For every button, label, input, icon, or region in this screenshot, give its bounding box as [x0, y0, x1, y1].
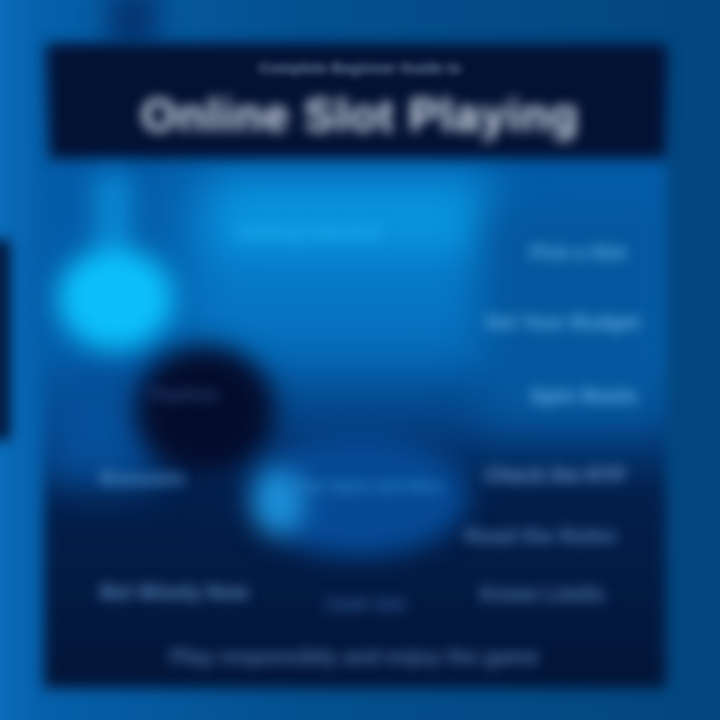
list item 2: Set Your Budget [485, 312, 640, 334]
subtitle: Complete Beginner Guide to [259, 60, 461, 77]
central ellipse [248, 436, 468, 556]
header band [50, 46, 666, 158]
list item 5: Read the Rules [465, 525, 617, 548]
footer text: Play responsibly and enjoy the game [170, 646, 539, 669]
label in ellipse: Free Spins and Wins [295, 478, 442, 495]
label: left middle: Bonuses [100, 468, 184, 490]
list item 4: Check the RTP [485, 465, 626, 487]
icon: hand pointing up [42, 159, 188, 366]
list item 1: Pick a Slot [530, 243, 626, 264]
main panel [44, 44, 666, 688]
title: Online Slot Playing [141, 89, 579, 141]
heading: top panel: Getting Started [235, 222, 379, 244]
icon: dark circle [135, 345, 275, 475]
label: lower left: Bet Wisely Now [100, 582, 249, 604]
list item 3: Spin Reels [530, 385, 637, 408]
ellipse highlight [252, 468, 304, 536]
list item 6: Know Limits [480, 583, 605, 606]
label: lower centre: Cash Out [325, 594, 405, 614]
label in dark circle: Paylines [150, 385, 219, 404]
